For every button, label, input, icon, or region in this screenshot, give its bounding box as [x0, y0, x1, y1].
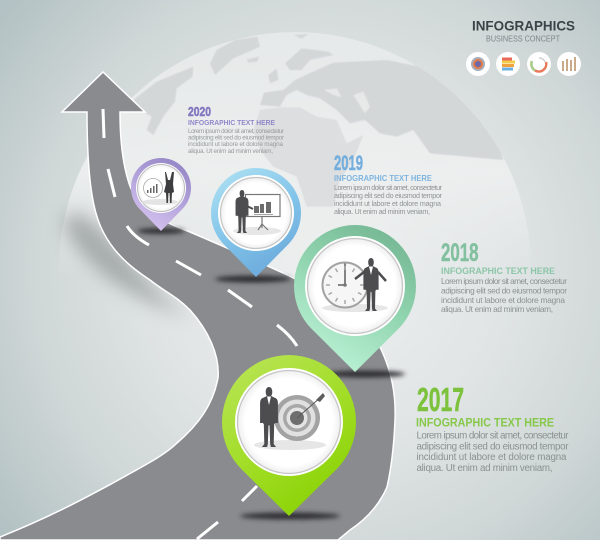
icon: businessman with target — [254, 387, 326, 450]
road with arrow — [0, 72, 395, 540]
globe with world map — [61, 32, 526, 242]
text block: 2017: incididunt ut labore et dolore magna — [416, 452, 567, 463]
text block: 2020: Lorem ipsum dolor sit amet, consectetur — [188, 128, 284, 135]
icon row — [466, 52, 581, 76]
icon: stacked labels — [496, 52, 520, 76]
header: title: BUSINESS CONCEPT — [486, 34, 560, 44]
icon: target — [466, 52, 490, 76]
text block: 2020: adipiscing elit sed do eiusmod tempor — [188, 134, 284, 142]
text block: 2017: adipiscing elit sed do eiusmod tempor — [416, 442, 569, 452]
text block: 2020: incididunt ut labore et dolore magna — [188, 141, 283, 148]
text block: 2018: adipiscing elit sed do eiusmod tempor — [441, 286, 567, 296]
text block: 2019 — [334, 152, 443, 216]
text block: 2017 — [416, 381, 569, 474]
text block: 2017: aliqua. Ut enim ad minim veniam, — [416, 463, 552, 474]
pin 2018: teal green — [294, 225, 416, 372]
text block: 2017: Lorem ipsum dolor sit amet, consectetur — [416, 430, 569, 442]
pin 2020: purple — [131, 158, 191, 231]
header: title — [472, 18, 575, 44]
road shadow — [65, 214, 190, 318]
text block: 2018: Lorem ipsum dolor sit amet, consectetur — [441, 276, 567, 286]
text block: 2019: 2019 — [334, 152, 363, 175]
header: title: INFOGRAPHICS — [472, 18, 575, 34]
pin 2017: green — [222, 355, 356, 516]
text block: 2018: aliqua. Ut enim ad minim veniam, — [441, 304, 553, 314]
pin 2019: blue — [211, 168, 301, 277]
text block: 2019: Lorem ipsum dolor sit amet, consectetur — [334, 183, 443, 192]
pin shadows — [137, 228, 405, 520]
icon: presenter with board — [233, 190, 281, 235]
text block: 2018: incididunt ut labore et dolore magna — [441, 295, 565, 305]
text block: 2019: INFOGRAPHIC TEXT HERE — [334, 173, 432, 183]
icon: businessman with clock — [322, 258, 388, 312]
text block: 2020: 2020 — [188, 104, 211, 119]
text block: 2020: INFOGRAPHIC TEXT HERE — [188, 118, 275, 127]
text block: 2019: adipiscing elit sed do eiusmod tempor — [334, 191, 443, 200]
text block: 2018: INFOGRAPHIC TEXT HERE — [441, 266, 556, 277]
text block: 2018: 2018 — [441, 239, 479, 267]
text block: 2019: incididunt ut labore et dolore magna — [334, 199, 441, 208]
icon: bar chart — [557, 52, 581, 76]
text block: 2018 — [441, 239, 567, 314]
text block: 2020 — [188, 104, 284, 155]
icon: donut chart — [527, 52, 551, 76]
road centre dashes — [103, 109, 297, 539]
text block: 2020: aliqua. Ut enim ad minim veniam, — [188, 148, 273, 155]
icon: woman celebrating with chart — [142, 172, 178, 205]
text block: 2019: aliqua. Ut enim ad minim veniam, — [334, 207, 430, 216]
text block: 2017: INFOGRAPHIC TEXT HERE — [416, 416, 554, 430]
text block: 2017: 2017 — [417, 381, 464, 418]
